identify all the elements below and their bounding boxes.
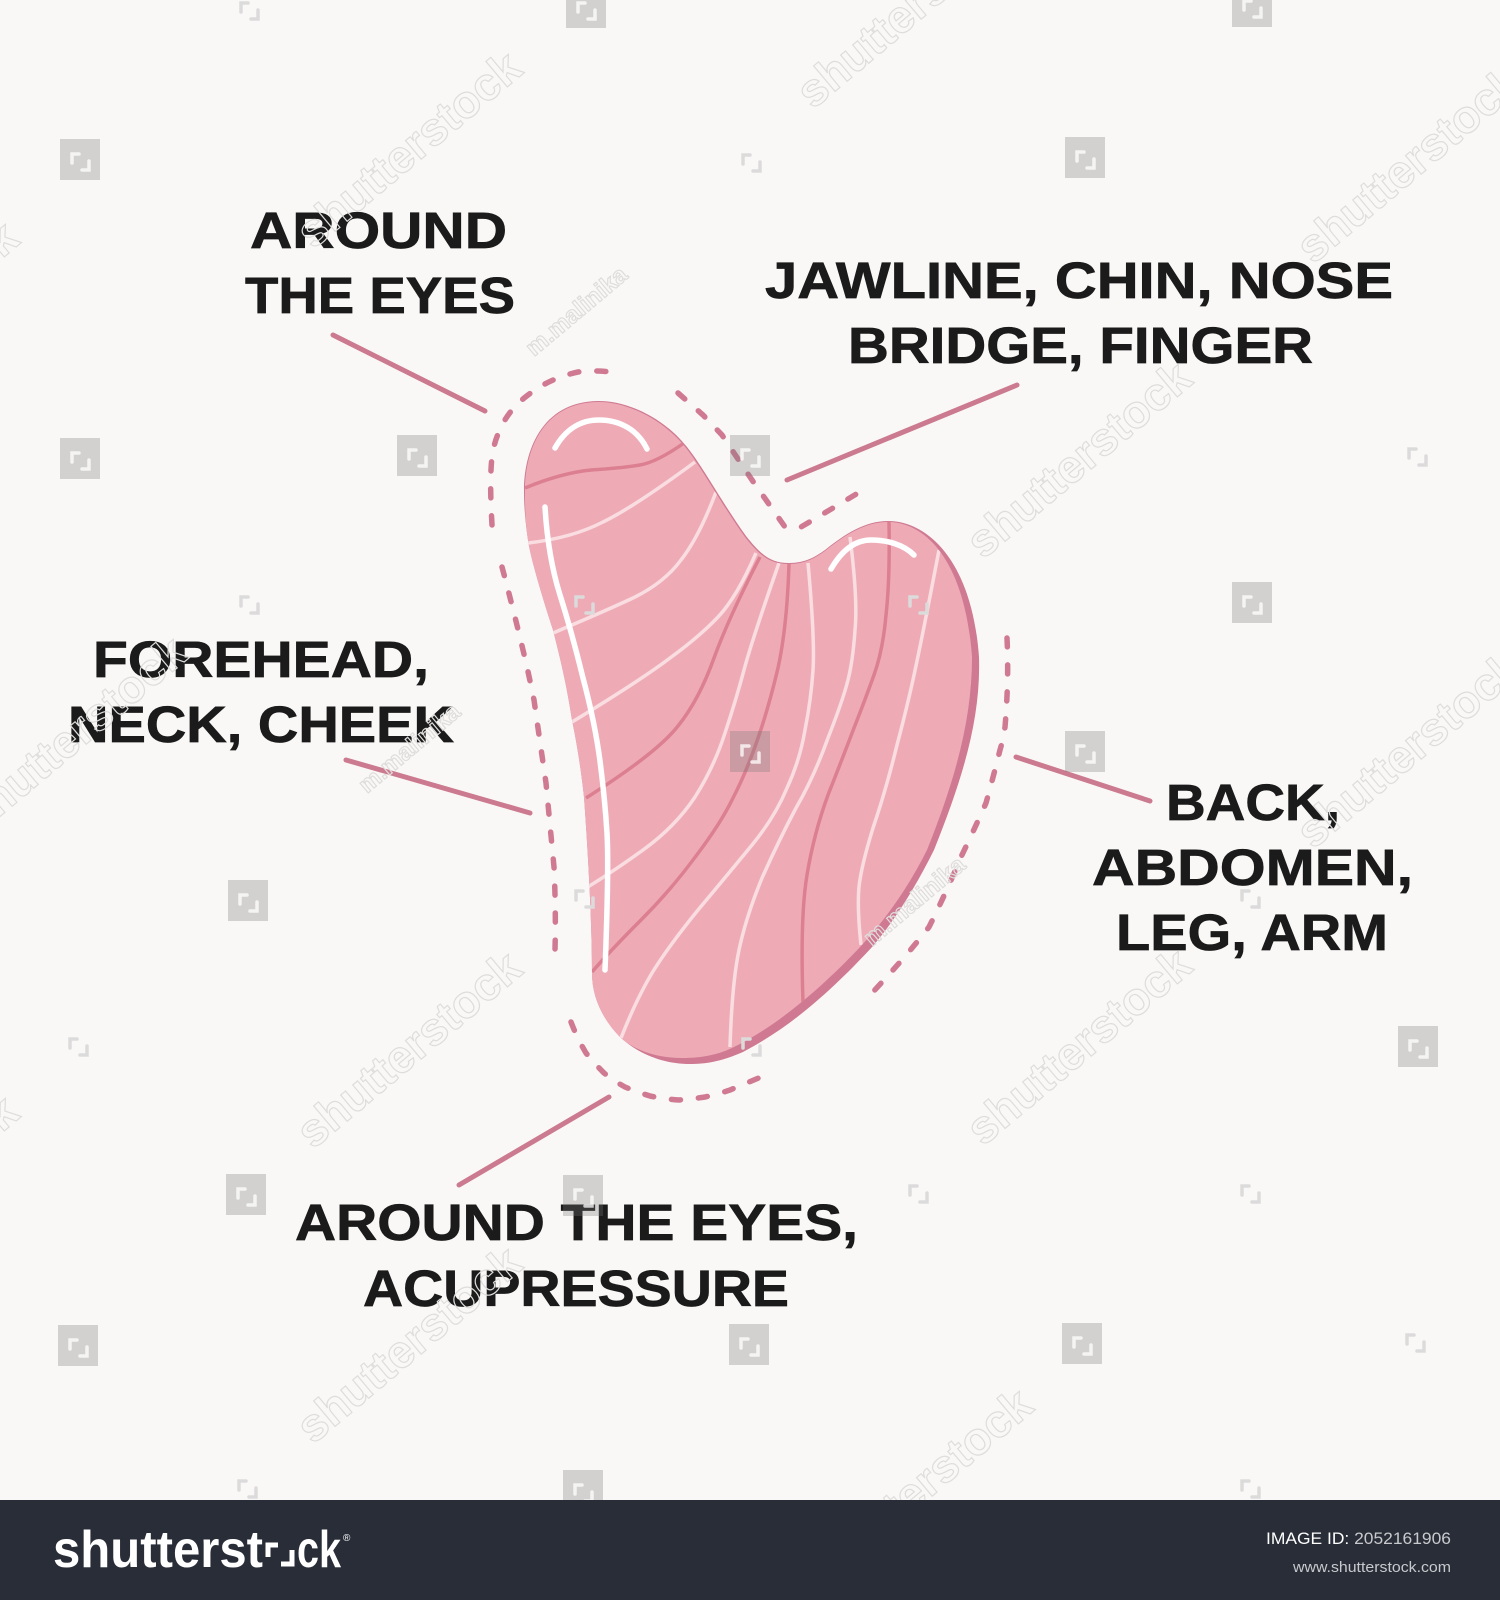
label: back, abdomen, leg, arm: ABDOMEN, [1092,839,1413,896]
label: jawline, chin, nose bridge, finger: BRIDGE, FINGER [848,317,1313,374]
dashed contour around the stone [491,371,1008,1100]
label: around the eyes: THE EYES [245,267,515,324]
label: jawline, chin, nose bridge, finger [765,252,1393,374]
leader line: acupressure [459,1097,609,1185]
leader line: back [1016,757,1150,801]
watermark text: m.malinika [354,698,466,799]
label: around the eyes, acupressure [295,1194,858,1317]
gua sha stone illustration [524,401,979,1064]
white highlights [545,420,914,970]
dark stone veins [525,443,889,1002]
watermark text: shutterstock [286,40,531,258]
watermark text: shutterstock [286,940,531,1158]
label: forehead, neck, cheek: FOREHEAD, [93,631,429,688]
watermark text: shutterstock [956,350,1201,568]
leader line: around the eyes [333,335,485,411]
leader line: jawline [787,385,1017,480]
footer logo: ck [297,1521,341,1579]
footer image id: IMAGE ID: 2052161906 [1266,1529,1451,1548]
stone pink face [525,402,972,1058]
footer logo: ® [343,1533,351,1544]
label: back, abdomen, leg, arm [1092,774,1413,961]
stone dark rim [524,401,979,1064]
label: jawline, chin, nose bridge, finger: JAWLINE, CHIN, NOSE [765,252,1393,309]
label: around the eyes, acupressure: AROUND THE EYES, [295,1194,858,1251]
light stone veins [528,462,939,1047]
label: forehead, neck, cheek [68,631,454,753]
watermark text: shutterstock [797,1377,1042,1595]
watermark text: m.malinika [521,261,633,362]
label: around the eyes, acupressure: ACUPRESSURE [363,1260,789,1317]
leader line: forehead [346,760,530,813]
watermark text: shutterstock [956,937,1201,1155]
label: around the eyes [245,202,515,324]
watermark text: shutterstock [286,1235,531,1453]
footer logo: shutterst [53,1521,263,1579]
watermark text: m.malinika [859,851,971,952]
footer bar [0,1500,1500,1600]
label: back, abdomen, leg, arm: BACK, [1166,774,1340,831]
footer website: www.shutterstock.com [1292,1559,1451,1576]
label: around the eyes: AROUND [250,202,507,259]
label: forehead, neck, cheek: NECK, CHEEK [68,696,454,753]
label: back, abdomen, leg, arm: LEG, ARM [1116,904,1388,961]
